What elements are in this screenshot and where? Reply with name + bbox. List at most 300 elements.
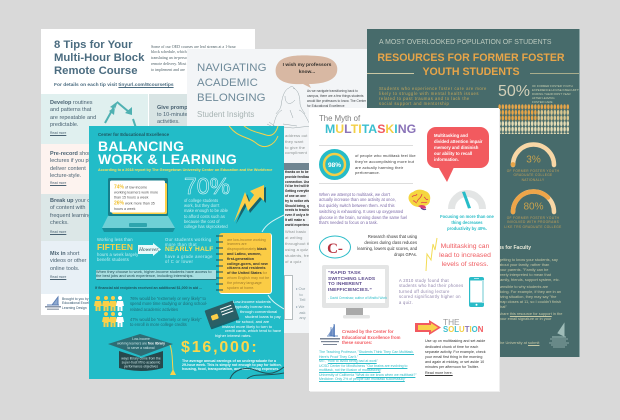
- gauge: 3%: [510, 142, 556, 168]
- notebook text: college-goers, and new: [227, 262, 268, 266]
- chart: people grid: [498, 104, 569, 134]
- bubble text: information.: [434, 157, 459, 162]
- illustration: graduation cap: ways library come from the: [121, 356, 161, 360]
- quote: INEFFICIENCIES.”: [328, 288, 372, 293]
- arrow: however: [138, 243, 162, 257]
- speech bubble: [276, 55, 338, 88]
- stat description: [182, 359, 282, 372]
- bubble text: divided attention impair: [434, 139, 482, 144]
- sketch text lower: throughout the: [285, 241, 313, 246]
- report subhead: According to a 2018 report by The Georgetown University Center on Education and the Workforce: [98, 168, 272, 172]
- tip: develop routines: [41, 94, 148, 144]
- title: 8 Tips for Your: [54, 38, 132, 50]
- tip text: checks.: [50, 220, 69, 226]
- tip text: and patterns that: [50, 107, 91, 113]
- icon: credit card: [204, 300, 240, 330]
- bubble text: our ability to recall: [434, 151, 472, 156]
- decorative curves: white: [262, 214, 284, 310]
- bubble text: [434, 132, 482, 164]
- attribution: - David Crenshaw, author of Mindful Work: [328, 296, 387, 300]
- text: phone study: turned off during lecture: [399, 289, 450, 294]
- subtitle: Student Insights: [197, 110, 254, 119]
- student quote box: provide feedback: [285, 175, 311, 179]
- paragraph: switching: [319, 192, 407, 226]
- intro paragraph: social support and mentorship: [379, 100, 449, 106]
- sketch text lower: at writing: [285, 235, 303, 240]
- pictogram: people: [94, 296, 126, 328]
- stat description: The average annual earnings of an undergraduate for a: [182, 359, 276, 363]
- callout bar: higher-income students: When they choose to work, higher-income students have access to: [96, 269, 211, 274]
- source links: multitask, not the illusion of multitasking": [319, 368, 382, 372]
- sketch text lower: using a quiz: [285, 247, 308, 252]
- paragraph: switching: actually increase than one activity at once,: [319, 197, 396, 202]
- title: BELONGING: [197, 92, 266, 104]
- statistic text 47%: to enroll in more college credits: [130, 322, 187, 327]
- illustration: woman writing: [267, 86, 309, 128]
- number word: FIFTEEN: [97, 242, 133, 252]
- bubble text: know...: [299, 70, 315, 75]
- source links: MIT, "How to avoid being bad at work": [319, 359, 378, 363]
- sketch text lower: What basic: [285, 229, 306, 234]
- stat: 50%: 50%: [498, 83, 530, 100]
- tip text: Pre-record short: [50, 151, 92, 157]
- solution text: your email first thing in the morning: [425, 355, 482, 359]
- illustration: laptop with statistics: than 15 hours a week: [114, 196, 149, 200]
- intro paragraph: campus, there are a few things students: [307, 94, 364, 98]
- credit heading: Created by the Center for: [342, 329, 394, 334]
- illustration: graduation cap: working learners are free library: [117, 342, 165, 346]
- text: phone study: a quiz.: [399, 300, 413, 305]
- statistic text 47%: 47% would be "extremely or very likely": [130, 316, 201, 322]
- intro text: translating an in-person: [151, 55, 189, 60]
- text: research: Research shows that using: [368, 234, 417, 239]
- heading: financial aid: If financial aid recipients received an additional $1,000 in aid ...: [95, 286, 202, 290]
- tip text: online tools.: [50, 266, 79, 272]
- logo: university: [549, 322, 569, 348]
- lead line: Our students working: [165, 237, 212, 242]
- gauge caption: thing decreases: [451, 220, 483, 225]
- stat caption: [532, 84, 580, 104]
- credit heading: Educational Excellence from: [342, 335, 401, 340]
- panel: resources for former foster youth: [367, 29, 580, 357]
- read more link: Read more: [50, 130, 66, 134]
- notebook text: the primary language: [227, 281, 262, 285]
- callout bar: higher-income students: [96, 270, 216, 278]
- panel: 8 tips for remote course: [41, 29, 255, 315]
- tip text: lectures if you plan to: [50, 158, 102, 164]
- paragraph: switching: switching is exhausting. It uses up oxygenated: [319, 209, 403, 214]
- small white box: [284, 275, 293, 320]
- heading: tips for faculty: Tips for Faculty: [494, 245, 531, 251]
- gauge: 80%: [510, 189, 556, 214]
- title: [98, 138, 237, 166]
- lead line: more than that: [165, 242, 197, 247]
- student quote box: try to notice what: [285, 199, 311, 203]
- stat: $16,000: $16,000:: [181, 339, 259, 356]
- text: phone study: [399, 278, 463, 305]
- tip text: activities.: [157, 119, 180, 125]
- sketch text lower: students, fresh: [285, 253, 314, 258]
- bullet 2: [296, 304, 306, 320]
- intro paragraph: likely to struggle with mental health issues: [379, 90, 479, 96]
- icon: cycle arrows: [104, 101, 136, 126]
- paragraph: switching: that's needed to focus on a task.: [319, 220, 378, 225]
- rule: [319, 183, 413, 184]
- student quote box: of one on one: [285, 194, 306, 198]
- icon: zigzag line: [425, 236, 438, 272]
- stat description: housing, food, transportation, and other living expenses.: [182, 367, 279, 371]
- rule left: [367, 73, 414, 74]
- decorative squiggle: [229, 364, 284, 379]
- tip text: predictable.: [50, 122, 78, 128]
- statistic text 47%: [130, 316, 201, 328]
- overline heading: A MOST OVERLOOKED POPULATION OF STUDENTS: [379, 38, 551, 46]
- tip text: [50, 251, 86, 272]
- student quote box: I'd be feel will that: [285, 184, 312, 188]
- stat caption: make enough to be able: [184, 208, 228, 213]
- title: YOUTH STUDENTS: [422, 66, 520, 78]
- bubble text: memory and diminish: [434, 145, 478, 150]
- student quote box: even if only a few: [285, 213, 311, 217]
- stat caption: DURING THEIR FIRST YEAR: [532, 92, 571, 96]
- bullet 1: [296, 286, 306, 302]
- organisation label: Center for Educational Excellence: [98, 132, 169, 137]
- panel: navigating academic belonging: [187, 49, 367, 333]
- solution text: minutes per afternoon for Twitter.: [425, 365, 479, 369]
- source links: [319, 350, 417, 382]
- intro paragraph: As we navigate transitioning back to: [307, 89, 358, 93]
- tip paragraph 3: your email signature or in your: [499, 316, 551, 321]
- notebook text: [227, 238, 269, 290]
- tip text: [157, 104, 192, 125]
- text: research: [354, 234, 417, 258]
- intro text: to implement and are: [151, 67, 185, 72]
- student quote box: thanks on to be: [285, 170, 309, 174]
- tip: pre-record: [41, 144, 255, 194]
- source links: UCSD Center for Mindfulness "Our brains are evolving to: [319, 364, 407, 368]
- quote: SWITCHING LEADS: [328, 277, 375, 282]
- read more link: Read more: [50, 274, 66, 278]
- gauge caption: [504, 216, 562, 229]
- intro text: block schedule, which means: [151, 49, 198, 54]
- intro text: Some of our OED courses are leaf stream at a 1-hour: [151, 44, 236, 48]
- stat text: of people who multitask feel like: [355, 153, 416, 158]
- bubble text: I wish my professors: [283, 62, 331, 68]
- illustration: laptop with statistics: [99, 176, 179, 234]
- text: working less than fifteen: [97, 237, 139, 263]
- text: nearly half: [165, 237, 215, 263]
- bullet 2: any: [299, 315, 306, 320]
- bullet 1: Tell: [299, 297, 305, 302]
- quote: TO INHERENT: [328, 282, 362, 287]
- credit heading: [342, 329, 401, 346]
- lead line: Working less than: [97, 237, 133, 242]
- tip paragraph 3: [499, 310, 562, 321]
- solution text: dedicated chunk of time for each: [425, 345, 478, 349]
- tip paragraph 2: that": [499, 304, 507, 309]
- student quote box: Should being, quit: [285, 204, 313, 208]
- stat caption: college has skyrocketed: [184, 224, 228, 229]
- arrow: however: However,: [138, 247, 160, 253]
- statistic text 76%: 76% would be "extremely or very likely" to: [130, 296, 206, 300]
- sketch text top: to give the: [285, 145, 305, 150]
- illustration: graduation cap: performance objectives: [124, 364, 158, 368]
- gauge caption: [432, 214, 502, 232]
- monitor with quote: [322, 265, 389, 319]
- sketch text top: [285, 133, 308, 155]
- tip text: Develop routines: [50, 100, 93, 106]
- title: Multi-Hour Block: [54, 52, 144, 64]
- solution text: [425, 339, 486, 376]
- title: [197, 62, 267, 104]
- panel: balancing work and learning: [89, 126, 284, 379]
- tip paragraph 1: family, friends, support system, etc.: [499, 277, 560, 282]
- notebook text: first-generation: [227, 257, 254, 261]
- monitor shape: [322, 265, 389, 319]
- title: [377, 52, 565, 78]
- illustration: graduation cap: super-trust lift to academic: [122, 360, 161, 364]
- intro text: [151, 44, 236, 72]
- quote: [328, 271, 375, 294]
- notebook text: disproportionately black: [227, 247, 267, 251]
- follow line: [97, 252, 138, 262]
- source links: University of California "What do we know when we multitask?": [319, 372, 417, 376]
- text: credit card borrowing: [213, 300, 284, 340]
- tip paragraph 1: about your family, rather than: [499, 262, 549, 267]
- stat caption: because the cost of: [184, 219, 220, 224]
- stat caption: to afford costs such as: [184, 214, 225, 219]
- tip text: Give prompts: [157, 104, 192, 110]
- intro paragraph: [307, 89, 366, 108]
- icon: C minus grade: C-: [327, 241, 343, 257]
- tip text: [50, 198, 100, 226]
- tip paragraph 1: freely interpreted to mean that: [499, 272, 551, 277]
- bubble text: Multitasking and: [434, 132, 468, 138]
- credit heading: these sources:: [342, 340, 372, 345]
- lead line: [165, 237, 212, 247]
- text lines: typically borrow less: [235, 304, 271, 309]
- text: phone study: A 2010 study found that: [399, 278, 449, 282]
- callout: memory: [427, 127, 489, 183]
- link line: For details on each tip visit tinyurl.com/8coursetips: [54, 83, 174, 88]
- intro paragraph: would like professors to know. The Center: [307, 99, 366, 103]
- illustration: laptop with statistics: working learners work more: [114, 190, 158, 194]
- gauge caption: OF FORMER FOSTER YOUTH: [507, 169, 559, 173]
- tip paragraph 1: your parents. "Family can be: [499, 267, 548, 272]
- tip: break up: [41, 194, 255, 241]
- notebook text: citizens and residents: [227, 266, 266, 270]
- gauge: productivity: [448, 190, 486, 210]
- title: BALANCING: [98, 138, 184, 154]
- follow line: [165, 254, 213, 264]
- notebook text: and Latino, women,: [227, 252, 261, 256]
- gauge caption: OF FORMER FOSTER YOUTH: [507, 216, 559, 220]
- source links: The Teaching Professor, "Students Think They Can Multitask.: [319, 350, 414, 354]
- tip text: to 10-minute: [157, 112, 188, 118]
- bullet 2: • We: [296, 304, 304, 309]
- tip paragraph 2: map closes at 11, so I couldn't finish: [499, 299, 561, 304]
- text lines: Low-income students: [233, 299, 271, 304]
- quote: “RAPID TASK: [328, 271, 361, 276]
- text: stress: lead to increased: [439, 252, 491, 258]
- student quote box: [285, 170, 315, 227]
- illustration: graduation cap: [108, 333, 176, 379]
- text lines: credit cards, which tend to have: [225, 328, 281, 333]
- heading small: The Myth of: [319, 114, 360, 123]
- sketch text top: address out: [285, 133, 308, 138]
- sketch text top: they want: [285, 139, 303, 144]
- stat text: performance.: [355, 170, 380, 175]
- text lines: instead more likely to turn to: [222, 324, 272, 329]
- rule: [319, 145, 413, 146]
- follow line: of C or lower: [165, 258, 193, 264]
- tip text: of content with: [50, 205, 85, 211]
- stat caption: FOSTER CARE: [532, 100, 553, 104]
- icon: phone: [469, 277, 484, 307]
- illustration: laptop with statistics: 26% work more than 35: [114, 200, 155, 206]
- statistic text 76%: related academic activities: [130, 307, 178, 312]
- title: ACADEMIC: [197, 76, 258, 88]
- text lines: student loans to pay: [245, 314, 281, 319]
- title: [54, 38, 144, 77]
- tip paragraph 2: sensible to why students are: [499, 284, 548, 289]
- solution text: and again at midday, or set aside 10: [425, 360, 484, 364]
- chart: 98% donut: [319, 149, 350, 180]
- bubble shape: [427, 127, 489, 183]
- illustration: graduation cap: to serve a national: [128, 346, 155, 350]
- source links: Here's Proof They Can't.": [319, 354, 358, 358]
- notebook callout: [219, 233, 272, 294]
- text lines: higher interest rates.: [215, 333, 251, 338]
- tip paragraph 3: share this resource for support in the: [499, 310, 562, 316]
- tip text: [50, 100, 96, 128]
- tip paragraph 2: doing. For example, if they are in an: [499, 289, 561, 294]
- text: phone study: students who had their phones: [399, 283, 463, 288]
- stat text: [355, 153, 416, 176]
- title: Remote Course: [54, 65, 138, 77]
- stat caption: work, but they don't: [184, 203, 219, 208]
- heading main: MULTITASKING: [325, 122, 416, 136]
- gauge caption: LIKE TRS GRADUATE COLLEGE: [504, 225, 562, 229]
- heading: the: THE: [443, 317, 460, 327]
- highlight: NEARLY HALF: [165, 246, 214, 253]
- chart: 98% donut: 98%: [328, 162, 341, 169]
- gauge caption: Focusing on more than one: [440, 214, 494, 219]
- tip text: [50, 151, 102, 179]
- sketch text lower: [285, 229, 314, 264]
- solution text: Read more here.: [425, 371, 453, 375]
- bullet 2: ask: [299, 310, 306, 315]
- logo: university: [320, 324, 340, 346]
- stat caption: OF FORMER FOSTER YOUTH: [532, 84, 573, 88]
- stat text: are actually harming their: [355, 165, 403, 170]
- gauge caption: productivity by 40%.: [447, 226, 487, 231]
- illustration: laptop with statistics: hours a week: [114, 207, 136, 211]
- panel: myth of multitasking: [309, 108, 499, 391]
- read more link: Read more: [50, 180, 66, 184]
- tip: mix in: [41, 241, 255, 294]
- tip text: lecture-style.: [50, 173, 81, 179]
- heading: solution: SOLUTION: [443, 325, 483, 334]
- callout bar: higher-income students: the best jobs and work experience, including internships.: [96, 273, 194, 278]
- statistic text 76%: [130, 296, 207, 312]
- icon: lightning bolt: [234, 184, 267, 224]
- tip text: Mix in short: [50, 251, 79, 257]
- intro paragraph: Students who experience foster care are more: [379, 86, 487, 90]
- tip text: videos or other: [50, 258, 86, 264]
- stat caption: EXPERIENCE HOUSE INSECURITY: [532, 88, 580, 92]
- student quote box: It will make a: [285, 218, 305, 222]
- sketch text lower: of a quiz: [285, 259, 301, 264]
- gauge caption: GRADUATE COLLEGE: [513, 173, 553, 177]
- contact line: the University at submit: [499, 340, 539, 344]
- paragraph: switching: When we attempt to multitask, we don't: [319, 192, 390, 196]
- stat description: 29-hour week. This is simply not enough to pay for tuition,: [182, 363, 282, 367]
- student quote box: connection. Use the: [285, 180, 315, 184]
- bullet 1: • Our: [296, 286, 305, 291]
- stat text: they're accomplishing more but: [355, 159, 414, 164]
- read more link: Read more: [50, 230, 66, 234]
- bullet list: [296, 286, 306, 320]
- text: research: drops GPAs.: [394, 252, 417, 257]
- header bar: [284, 163, 310, 170]
- tip: give prompts: [149, 94, 255, 144]
- notebook text: are low-income working: [227, 238, 266, 242]
- solution text: Use up on multitasking and set aside: [425, 339, 485, 343]
- source links: Medicine: Only 2% of people can multitask successfully": [319, 377, 406, 381]
- gauge: 80%: 80%: [523, 202, 544, 212]
- icon: C minus grade: [319, 235, 351, 259]
- text lines: for school, and are: [236, 319, 269, 324]
- tip paragraph 1: getting to know your students, say: [499, 256, 558, 262]
- solution text: separate activity. For example, check: [425, 350, 486, 354]
- stat caption: of college students: [184, 198, 218, 203]
- illustration: laptop with statistics: 74% of low-income: [114, 184, 147, 190]
- intro text: remote delivery. Most: [151, 61, 186, 66]
- intro paragraph: for Educational Excellence: [307, 104, 345, 108]
- notebook text: of the United States for: [227, 271, 267, 275]
- paragraph: switching: glucose in the brain, running down the same fuel: [319, 215, 407, 220]
- notebook text: spoken at home.: [227, 286, 254, 290]
- gauge caption: [506, 169, 559, 182]
- credit text: Brought to you by the: [62, 297, 94, 301]
- text lines: through conventional: [240, 309, 277, 314]
- student quote box: world experience": [285, 223, 313, 227]
- illustration: graduation cap: Low-income: [132, 337, 150, 341]
- text: phone study: scored significantly higher on: [399, 294, 461, 299]
- intro paragraph: [379, 86, 487, 106]
- icon: brain: [407, 189, 431, 211]
- text: stress: Multitasking can: [441, 242, 489, 250]
- gauge caption: NATIONALLY: [522, 178, 544, 182]
- stat caption: [184, 198, 228, 229]
- notebook text: learners are: [227, 242, 247, 246]
- tip paragraph 2: living situation, they may say "the: [499, 294, 556, 299]
- bullet 1: to: [299, 292, 303, 297]
- text lines: [213, 300, 281, 339]
- tip paragraph 2: [499, 284, 561, 309]
- follow line: have a grade average: [165, 254, 213, 258]
- tip text: are repeatable and: [50, 115, 96, 121]
- stat caption: AFTER LEAVING: [532, 96, 555, 100]
- intro paragraph: related to past traumas and to lack the: [379, 96, 470, 100]
- tip text: deliver content: [50, 166, 86, 172]
- title: RESOURCES FOR FORMER FOSTER: [377, 52, 565, 64]
- title: NAVIGATING: [197, 62, 267, 74]
- tip paragraph 1: [499, 256, 560, 282]
- text: stress: [434, 242, 496, 268]
- paragraph: switching: but quickly switch between them. And this: [319, 203, 395, 208]
